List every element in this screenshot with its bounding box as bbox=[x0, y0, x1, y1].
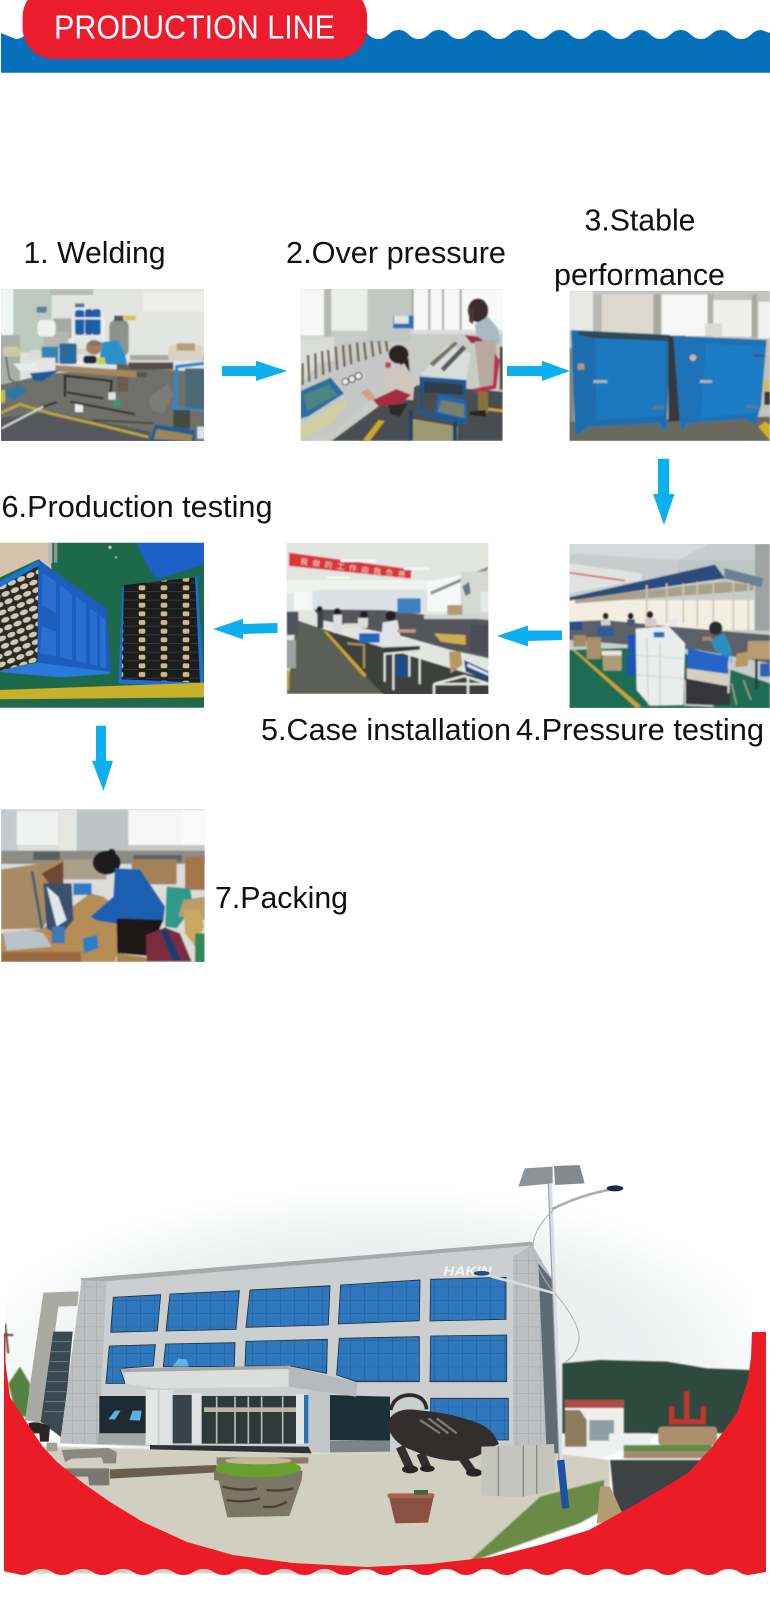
red banner with slogan: 我做的工作由我负责 bbox=[300, 556, 406, 580]
seated worker at bench bbox=[702, 621, 732, 663]
arrow: step 6 to 7 bbox=[92, 726, 113, 791]
heading: step 1: 1. Welding bbox=[24, 235, 166, 270]
photo: pressure testing bbox=[565, 542, 770, 708]
street lamp bbox=[474, 1165, 623, 1508]
photo: over pressure bbox=[298, 288, 503, 442]
benches bbox=[47, 1443, 308, 1485]
trees and background bbox=[5, 1323, 751, 1528]
heading: step 5: 5.Case installation bbox=[261, 712, 511, 747]
title text: PRODUCTION LINE bbox=[54, 9, 335, 46]
photo: case installation bbox=[284, 542, 489, 695]
heading: step 7: 7.Packing bbox=[215, 880, 348, 915]
arrow: step 1 to 2 bbox=[222, 361, 287, 381]
entrance canopy bbox=[119, 1366, 357, 1397]
stack of white boxes bbox=[636, 626, 685, 706]
heading: step 3 bbox=[554, 203, 725, 292]
windows bbox=[106, 1277, 508, 1440]
arrow: step 2 to 3 bbox=[507, 361, 570, 381]
sky bbox=[16, 1211, 736, 1458]
heading: step 2: 2.Over pressure bbox=[286, 235, 506, 270]
photo: stable performance bbox=[565, 288, 770, 442]
photo: production testing bbox=[0, 542, 205, 709]
seated worker bbox=[361, 345, 415, 417]
title pill bbox=[23, 0, 367, 59]
heading: step 4: 4.Pressure testing bbox=[516, 712, 764, 747]
heading: step 3: 3.Stable bbox=[584, 203, 696, 238]
packing worker bbox=[91, 849, 192, 962]
heading: step 6: 6.Production testing bbox=[2, 489, 272, 524]
hedge and bundles bbox=[467, 1480, 604, 1563]
arrow: step 5 to 6 bbox=[213, 619, 278, 639]
arrow: step 4 to 5 bbox=[497, 626, 562, 646]
header banner: blue wave band bbox=[1, 30, 770, 73]
red wave footer shape bbox=[4, 1332, 766, 1575]
photo: company building bbox=[0, 1163, 755, 1573]
main building bbox=[25, 1242, 560, 1453]
workers at the line bbox=[317, 606, 416, 642]
small sculpture left bbox=[28, 1422, 50, 1442]
bull sculpture bbox=[387, 1395, 499, 1477]
flower planter bbox=[214, 1457, 303, 1517]
heading: step 3: performance bbox=[554, 257, 725, 292]
arrow: step 3 to 4 bbox=[653, 459, 674, 525]
welder bbox=[83, 340, 128, 392]
photo: welding bbox=[0, 288, 205, 442]
clay pot bbox=[388, 1490, 434, 1523]
plaza bbox=[0, 1445, 610, 1573]
HAKIN sign: HAKIN bbox=[443, 1265, 493, 1279]
crates of granite bbox=[481, 1444, 556, 1497]
standing worker bbox=[465, 298, 500, 417]
photo: packing bbox=[0, 808, 207, 965]
